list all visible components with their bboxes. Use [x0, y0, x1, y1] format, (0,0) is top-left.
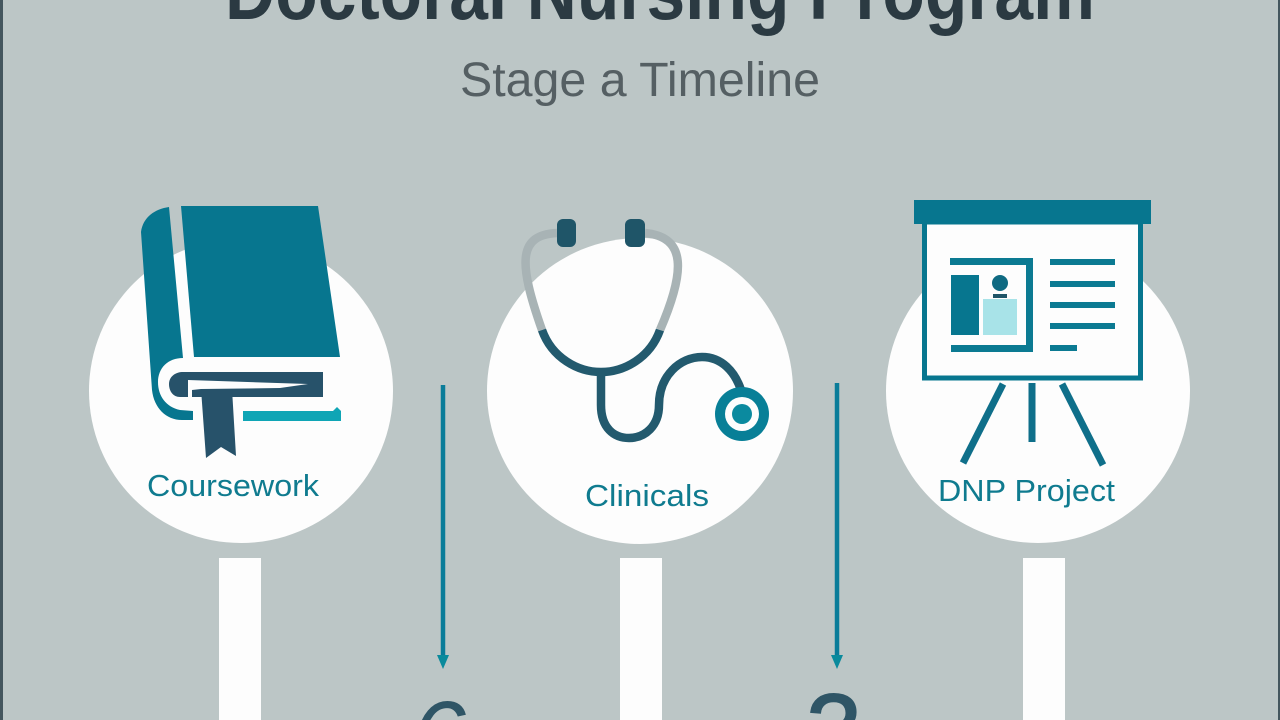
pillar: coursework — [219, 558, 261, 720]
subtitle: Stage a Timeline — [460, 54, 820, 107]
label: clinicals: Clinicals — [585, 478, 709, 513]
stage 3: DNP project — [886, 200, 1190, 720]
circle: DNP project — [886, 239, 1190, 543]
arrow: coursework to clinicals — [437, 385, 449, 669]
icon: presentation board — [914, 200, 1151, 465]
icon: book — [141, 206, 341, 458]
stage 2: clinicals — [487, 219, 793, 720]
circle: coursework — [89, 239, 393, 543]
label: DNP project: DNP Project — [938, 473, 1115, 508]
stage 1: coursework — [89, 206, 393, 720]
icon: stethoscope — [526, 219, 769, 441]
label: coursework: Coursework — [147, 468, 320, 503]
pillar: DNP project — [1023, 558, 1065, 720]
pillar: clinicals — [620, 558, 662, 720]
circle: clinicals — [487, 238, 793, 544]
arrow: clinicals to DNP project — [831, 383, 843, 669]
